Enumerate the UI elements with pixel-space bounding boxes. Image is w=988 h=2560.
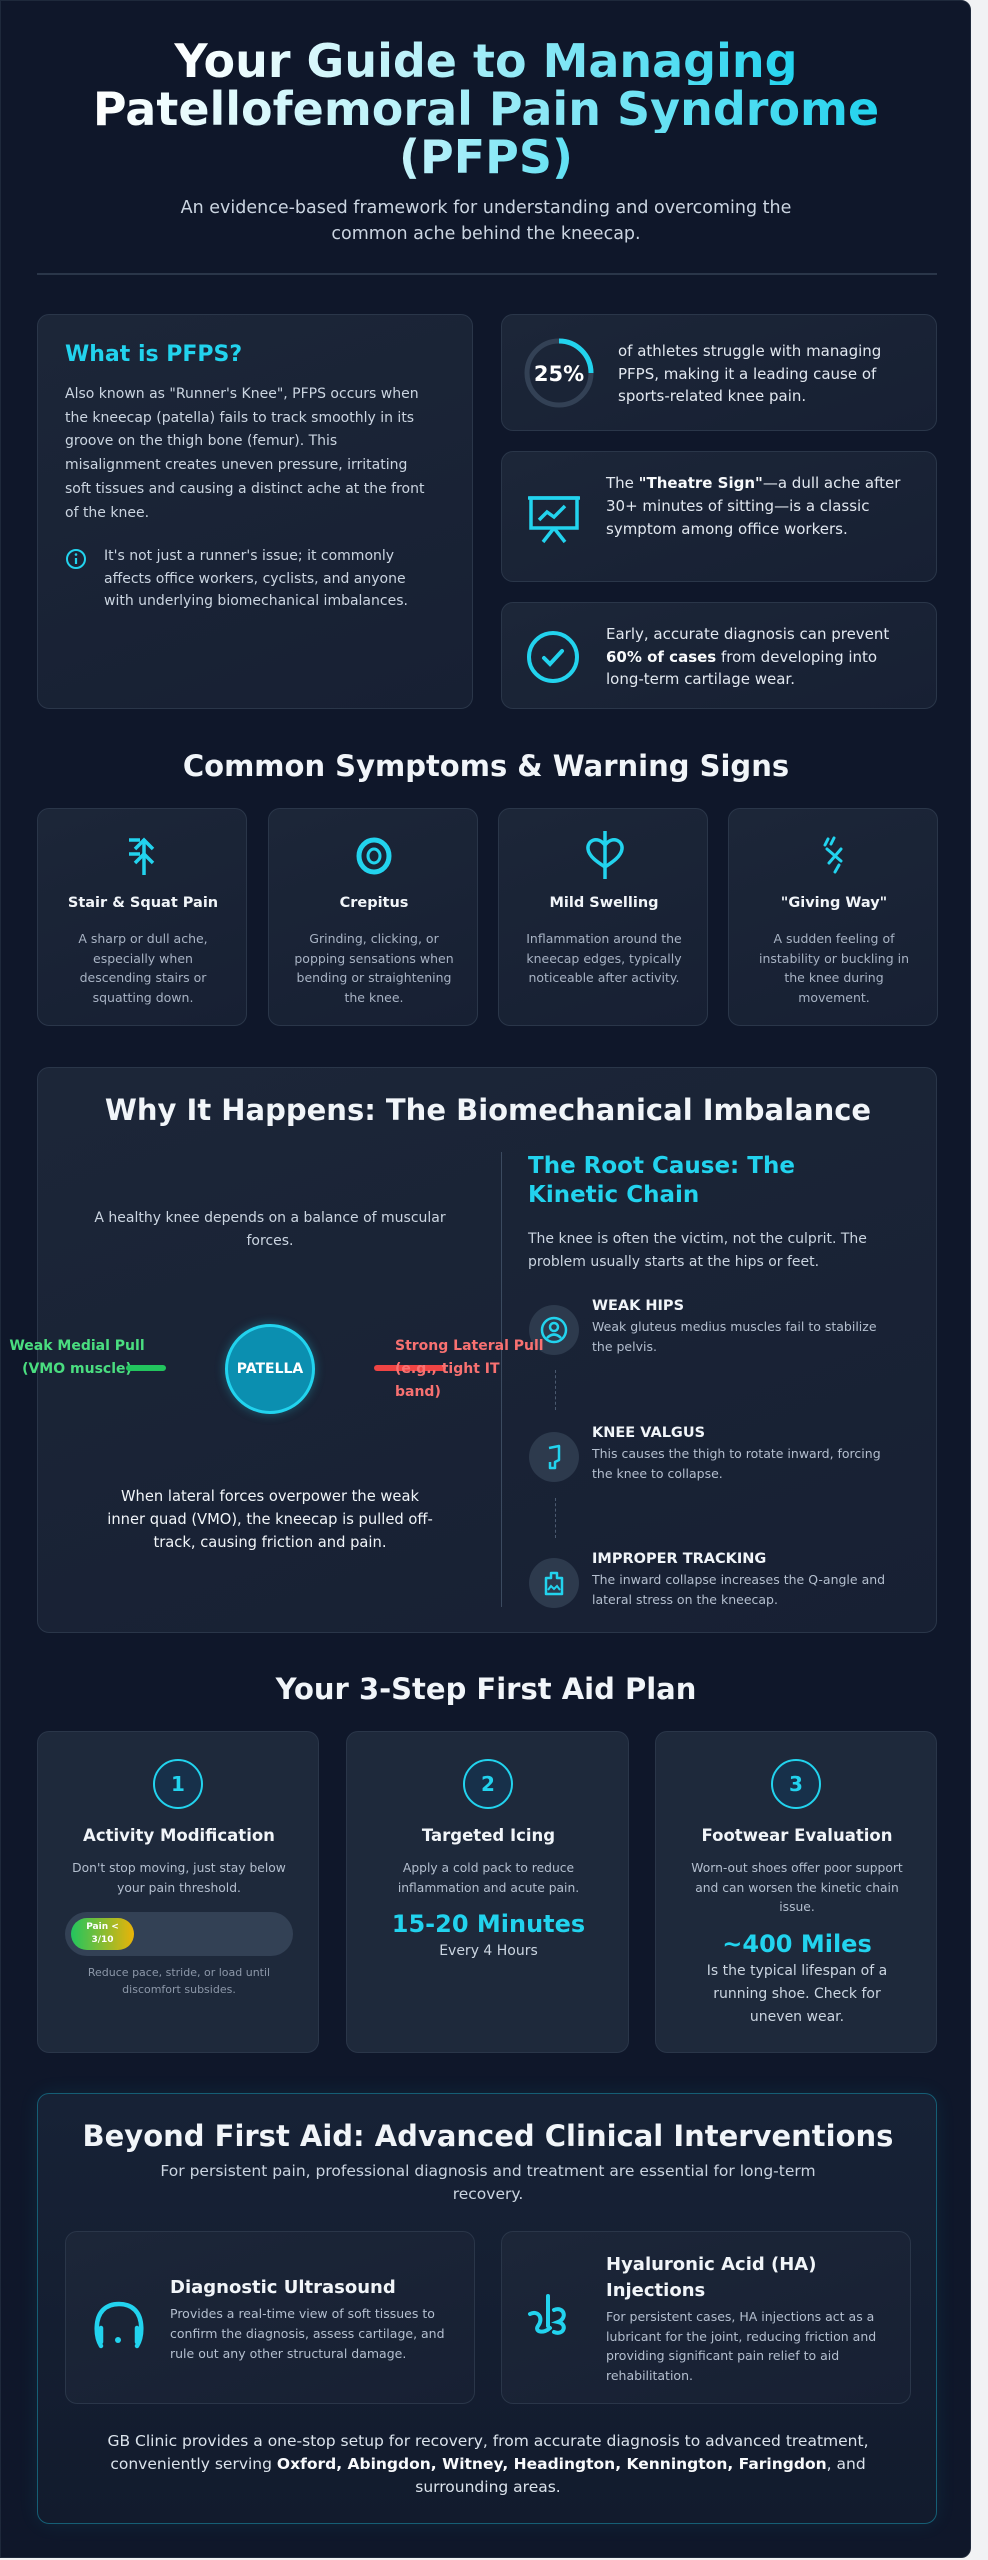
- circle: patella: PATELLA: [237, 1361, 303, 1377]
- text block: definition: groove on the thigh bone (femur). This: [65, 433, 337, 449]
- pill: pain < 3/10: [71, 1918, 134, 1950]
- subtitle: [180, 198, 791, 244]
- title: KNEE VALGUS: [592, 1425, 705, 1441]
- description: For persistent cases, HA injections act as a lubricant for the joint, reducing friction and providing significant pain relief to aid rehabilitation.: [606, 2309, 876, 2382]
- step: improper tracking: [529, 1551, 885, 1608]
- description: Weak gluteus medius muscles fail to stabilize the pelvis.: [592, 1319, 877, 1354]
- step card 3: footwear: [655, 1731, 937, 2053]
- description: A sudden feeling of instability or buckling in the knee during movement.: [759, 931, 909, 1004]
- symptom card: stair & squat: [37, 808, 247, 1026]
- text: lateral forces: inner quad (VMO), the kneecap is pulled off-: [107, 1511, 433, 1528]
- description: Don't stop moving, just stay below your pain threshold.: [72, 1861, 286, 1894]
- title: [93, 34, 879, 184]
- card: diagnostic ultrasound: [65, 2231, 475, 2404]
- stat label: Is the typical lifespan of a running shoe. Check for uneven wear.: [707, 1963, 887, 2025]
- text block: definition: of the knee.: [65, 505, 149, 521]
- step: knee valgus: [529, 1425, 881, 1482]
- title: Hyaluronic Acid (HA) Injections: [606, 2254, 816, 2301]
- heading: beyond first aid: Beyond First Aid: Advanced Clinical Interventions: [83, 2119, 893, 2153]
- title: (PFPS): [399, 130, 573, 184]
- title: Stair & Squat Pain: [68, 895, 218, 911]
- title: "Giving Way": [781, 895, 887, 911]
- title: Your Guide to Managing: [174, 34, 798, 88]
- description: Inflammation around the kneecap edges, typically noticeable after activity.: [526, 931, 682, 985]
- step: weak hips: [529, 1298, 877, 1355]
- arrow: green: [126, 1365, 166, 1371]
- description: Apply a cold pack to reduce inflammation and acute pain.: [398, 1861, 579, 1894]
- stat card: early diagnosis: [501, 602, 937, 709]
- text: info note: It's not just a runner's issue; it commonly affects office workers, cyclists, and anyone with underlying biomechanical imbalances.: [104, 548, 408, 609]
- text: theatre sign: The "Theatre Sign"—a dull ache after 30+ minutes of sitting—is a classic symptom among office workers.: [606, 474, 900, 538]
- text: GB clinic footer: GB Clinic provides a one-stop setup for recovery, from accurate diagnosis to advanced treatment, conveniently serving Oxford, Abingdon, Witney, Headington, Kennington, Faringdon, and surrounding areas.: [107, 2432, 869, 2496]
- icon: tracking: [529, 1558, 579, 1608]
- title: Mild Swelling: [549, 895, 659, 911]
- text block: definition: the kneecap (patella) fails to track smoothly in its: [65, 410, 414, 426]
- text block: definition: misalignment creates uneven pressure, irritating: [65, 457, 407, 473]
- circle: patella: [225, 1324, 315, 1414]
- text: healthy knee: A healthy knee depends on a balance of muscular forces.: [94, 1210, 446, 1249]
- text: lateral forces: track, causing friction and pain.: [154, 1534, 386, 1551]
- title: WEAK HIPS: [592, 1298, 684, 1314]
- subtitle: An evidence-based framework for understanding and overcoming the: [181, 198, 791, 218]
- symptom card: crepitus: [268, 808, 478, 1026]
- heading: symptoms: Common Symptoms & Warning Signs: [183, 749, 789, 783]
- icon: number 3: [771, 1759, 821, 1809]
- description: Grinding, clicking, or popping sensations when bending or straightening the knee.: [294, 931, 454, 1004]
- icon: ring 25%: 25%: [534, 362, 584, 386]
- stat label: Every 4 Hours: [439, 1943, 538, 1959]
- symptom card: swelling: [498, 808, 708, 1026]
- icon: number 1: 1: [171, 1772, 185, 1796]
- stat: 400 miles: ~400 Miles: [722, 1930, 872, 1958]
- label: weak medial pull: Weak Medial Pull: [9, 1338, 145, 1354]
- icon: injection: [528, 2294, 566, 2335]
- title: Crepitus: [340, 895, 408, 911]
- diagram: patella forces: [9, 1319, 544, 1419]
- title: Footwear Evaluation: [702, 1826, 892, 1845]
- stat: 15-20 minutes: 15-20 Minutes: [392, 1910, 585, 1938]
- icon: knee: [529, 1432, 579, 1482]
- heading: first aid: Your 3-Step First Aid Plan: [276, 1672, 696, 1706]
- pain bar: [65, 1912, 293, 1956]
- heading: what is PFPS: What is PFPS?: [65, 342, 242, 367]
- icon: number 1: [153, 1759, 203, 1809]
- title: IMPROPER TRACKING: [592, 1551, 766, 1567]
- text: lateral forces: [107, 1488, 433, 1551]
- title: Activity Modification: [83, 1826, 275, 1845]
- icon: ring 25%: [524, 338, 594, 408]
- text: victim: The knee is often the victim, not the culprit. The problem usually starts at the hips or feet.: [528, 1231, 867, 1270]
- heading: why it happens: Why It Happens: The Biomechanical Imbalance: [105, 1093, 871, 1127]
- subtitle: For persistent pain, professional diagnosis and treatment are essential for long-term recovery.: [160, 2162, 816, 2203]
- icon: info: [66, 549, 86, 569]
- icon: number 2: [463, 1759, 513, 1809]
- text block: definition: Also known as "Runner's Knee", PFPS occurs when: [65, 386, 419, 402]
- description: Worn-out shoes offer poor support and can worsen the kinetic chain issue.: [691, 1861, 903, 1914]
- stat card: theatre sign: [501, 451, 937, 582]
- arrow: red: [374, 1365, 446, 1371]
- title: Patellofemoral Pain Syndrome: [93, 82, 879, 136]
- panel: biomechanical imbalance: [37, 1067, 937, 1633]
- subtitle: common ache behind the kneecap.: [331, 224, 641, 244]
- text block: definition: [65, 386, 424, 521]
- icon: stairs arrows: [129, 838, 154, 875]
- description: Provides a real-time view of soft tissues to confirm the diagnosis, assess cartilage, and rule out any other structural damage.: [170, 2306, 445, 2361]
- icon: number 2: 2: [481, 1772, 495, 1796]
- step card 2: targeted icing: [346, 1731, 629, 2053]
- panel: advanced interventions: [37, 2093, 937, 2524]
- icon: presentation chart: [528, 496, 580, 544]
- symptom card: giving way: [728, 808, 938, 1026]
- text block: definition: soft tissues and causing a distinct ache at the front: [65, 481, 424, 497]
- panel: what is PFPS: [37, 314, 473, 709]
- icon: check circle: [527, 631, 579, 683]
- description: This causes the thigh to rotate inward, forcing the knee to collapse.: [592, 1446, 881, 1481]
- heading: root cause: The Root Cause: The Kinetic Chain: [528, 1153, 795, 1208]
- stat card: 25%: [501, 314, 937, 431]
- label: weak medial pull: [9, 1338, 145, 1377]
- label: strong lateral pull: Strong Lateral Pull (e.g., tight IT band): [395, 1338, 544, 1400]
- step card 1: activity modification: [37, 1731, 319, 2053]
- icon: swelling: [586, 831, 624, 879]
- description: A sharp or dull ache, especially when descending stairs or squatting down.: [78, 931, 208, 1004]
- icon: ultrasound head: [94, 2302, 144, 2348]
- title: Diagnostic Ultrasound: [170, 2277, 396, 2298]
- card: HA injections: [501, 2231, 911, 2404]
- pill: pain < 3/10: 3/10: [91, 1935, 114, 1945]
- icon: broken link: [823, 836, 843, 874]
- text: stat: of athletes struggle with managing PFPS, making it a leading cause of sports-related knee pain.: [618, 342, 881, 405]
- icon: number 3: 3: [789, 1772, 803, 1796]
- info note: [66, 548, 408, 609]
- title: Targeted Icing: [422, 1826, 555, 1845]
- icon: target: [356, 838, 392, 874]
- text: diagnosis: Early, accurate diagnosis can prevent 60% of cases from developing into long-term cartilage wear.: [606, 625, 889, 688]
- text: lateral forces: When lateral forces overpower the weak: [121, 1488, 419, 1505]
- label: weak medial pull: (VMO muscle): [22, 1361, 132, 1377]
- icon: person: [529, 1305, 579, 1355]
- note: Reduce pace, stride, or load until discomfort subsides.: [88, 1966, 270, 1996]
- pill: pain < 3/10: Pain <: [86, 1922, 119, 1932]
- description: The inward collapse increases the Q-angle and lateral stress on the kneecap.: [592, 1572, 885, 1607]
